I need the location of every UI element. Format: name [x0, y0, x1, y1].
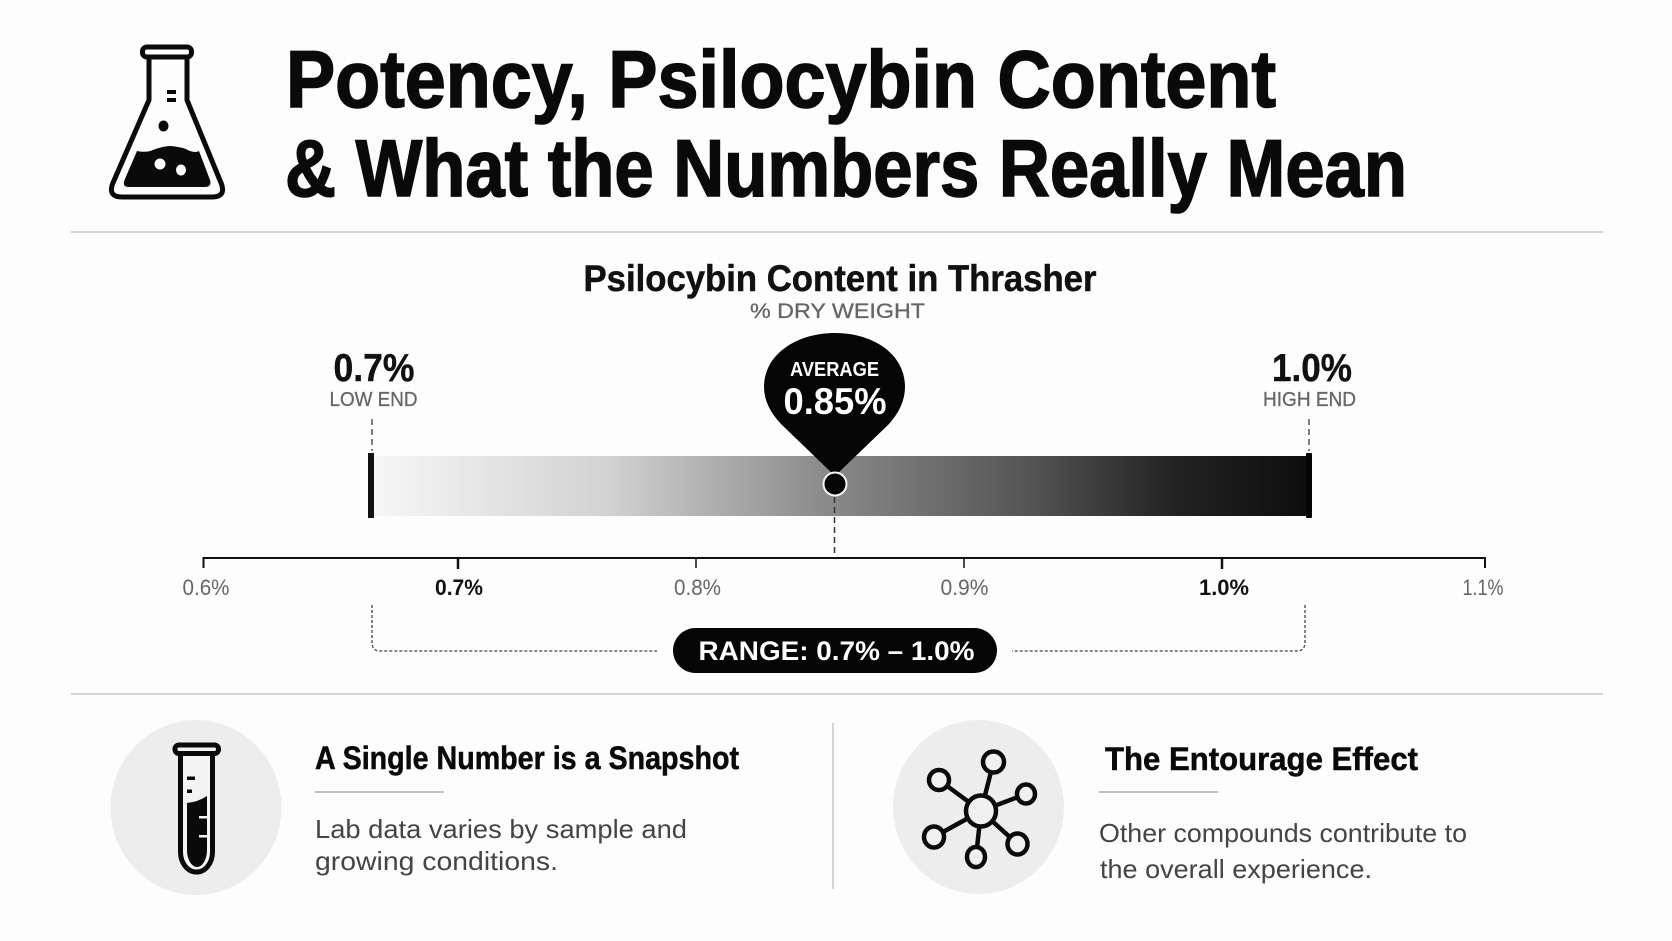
high end label [1263, 347, 1356, 411]
chart heading: Psilocybin Content in Thrasher [584, 258, 1096, 299]
average pin: 0.85% [784, 381, 886, 422]
average pin [764, 333, 905, 496]
high end label: HIGH END [1263, 389, 1356, 411]
text block: Other compounds contribute to [1099, 818, 1467, 848]
text block: the overall experience. [1100, 854, 1372, 884]
heading: The Entourage Effect [1105, 741, 1418, 777]
low end label [330, 347, 418, 411]
average pin: AVERAGE [790, 359, 879, 381]
icon: flask [111, 47, 223, 197]
title: & What the Numbers Really Mean [285, 124, 1407, 214]
range pill [673, 628, 997, 673]
icon: molecule network [924, 752, 1035, 867]
text block: growing conditions. [315, 846, 558, 876]
low end label: 0.7% [334, 347, 414, 390]
range bracket [372, 605, 1305, 651]
low end label: LOW END [330, 389, 418, 411]
panel: single number [110, 720, 739, 895]
text block [315, 814, 687, 876]
gradient bar [368, 453, 1312, 518]
range chart [182, 333, 1504, 673]
axis labels: 0.8% [674, 575, 721, 600]
title [285, 35, 1407, 214]
chart heading: % DRY WEIGHT [750, 300, 925, 323]
text block: Lab data varies by sample and [315, 814, 687, 844]
heading: A Single Number is a Snapshot [315, 740, 739, 776]
axis labels: 0.9% [940, 575, 988, 600]
axis labels: 0.6% [182, 575, 230, 600]
axis labels [182, 575, 1504, 600]
icon: test tube [175, 745, 218, 872]
axis labels: 1.0% [1199, 575, 1249, 600]
text block [1099, 818, 1467, 884]
axis [204, 558, 1485, 569]
range pill: RANGE: 0.7% – 1.0% [698, 636, 974, 666]
chart heading [584, 258, 1096, 323]
axis labels: 1.1% [1462, 575, 1504, 600]
axis labels: 0.7% [435, 575, 483, 600]
high end label: 1.0% [1272, 347, 1352, 390]
panel: entourage effect [893, 720, 1467, 894]
title: Potency, Psilocybin Content [286, 35, 1276, 125]
